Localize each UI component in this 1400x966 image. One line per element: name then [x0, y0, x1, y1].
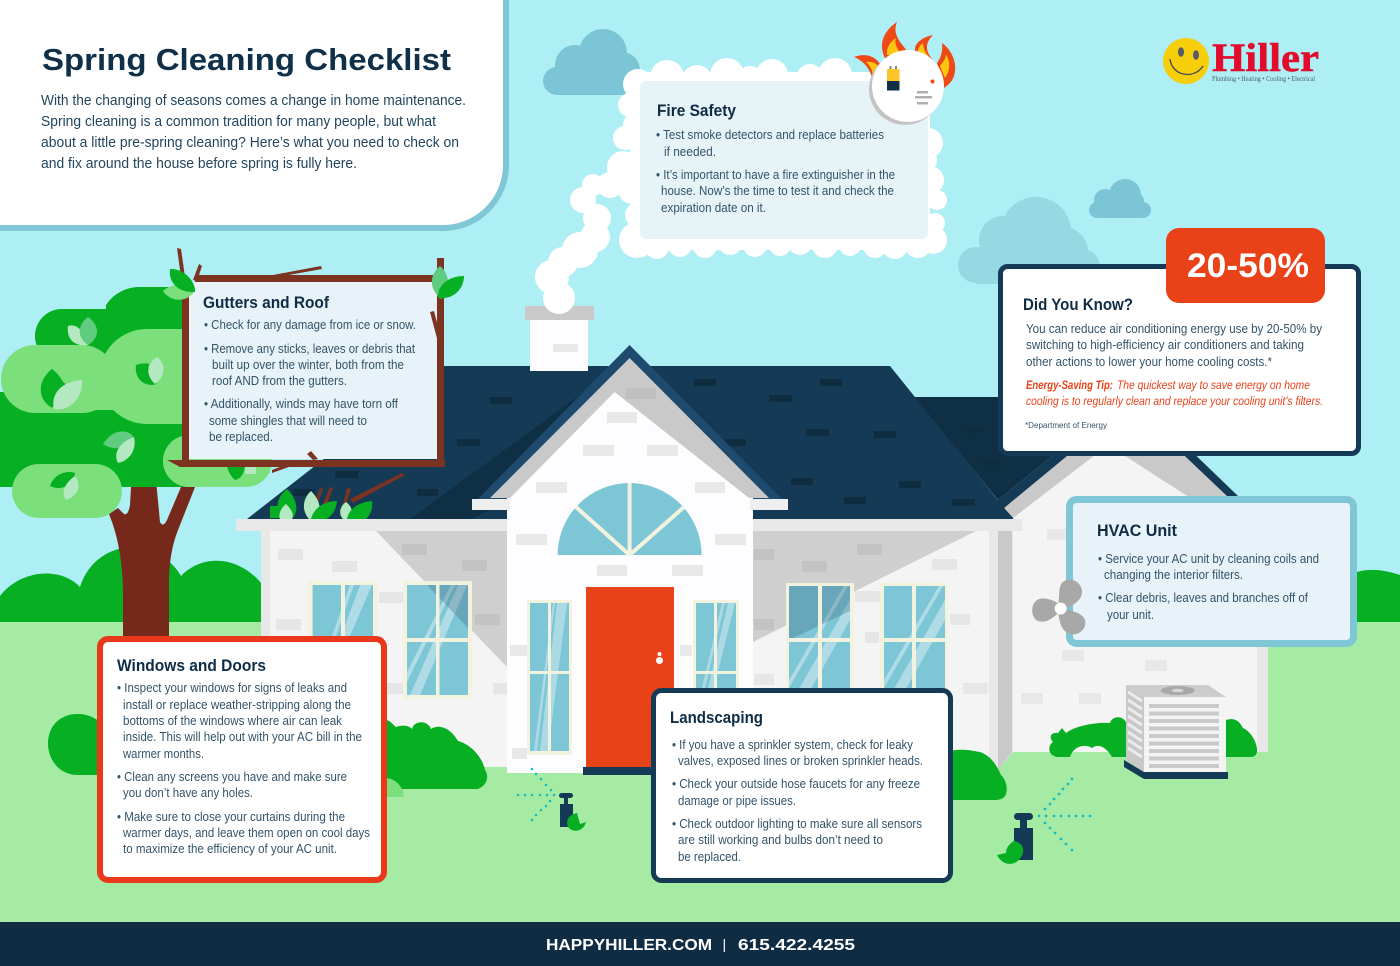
window: far left [308, 581, 377, 699]
tree foliage [0, 287, 272, 518]
list: warmer days, and leave them open on cool days [122, 826, 370, 840]
back roof shade [914, 397, 1052, 500]
hills behind house [0, 547, 1400, 622]
list: • Check for any damage from ice or snow. [204, 318, 416, 332]
panel: windows and doors [100, 639, 384, 880]
list: be replaced. [678, 850, 741, 864]
intro paragraph: Spring cleaning is a common tradition for many people, but what [41, 114, 436, 130]
tree trunk [109, 470, 195, 640]
list [672, 738, 923, 864]
bush: beside AC left [1049, 717, 1126, 757]
energy tip: Energy-Saving Tip: [1026, 380, 1113, 392]
list: changing the interior filters. [1104, 568, 1243, 582]
list [117, 681, 370, 856]
tree [0, 287, 272, 640]
panel: hvac unit [1032, 500, 1354, 644]
heading: Fire Safety [657, 101, 736, 120]
list: are still working and bulbs don’t need to [678, 833, 883, 847]
body text [1026, 322, 1323, 369]
energy tip: cooling is to regularly clean and replace your cooling unit’s filters. [1026, 396, 1323, 408]
panel: gutters and roof [163, 248, 464, 519]
list: your unit. [1107, 608, 1154, 622]
list: some shingles that will need to [209, 414, 367, 428]
bush: beside column [945, 750, 1007, 800]
right column [989, 531, 1013, 770]
cloud: top centre [543, 29, 640, 95]
body text: switching to high-efficiency air conditioners and taking [1026, 338, 1304, 352]
smoke trail and cloud [535, 58, 947, 314]
footer [0, 922, 1400, 966]
list: warmer months. [122, 747, 204, 761]
front window right [693, 600, 739, 700]
list: roof AND from the gutters. [212, 374, 347, 388]
house: chimney [525, 306, 594, 371]
list: • Clean any screens you have and make sure [117, 770, 347, 784]
sprinkler: left [517, 768, 586, 831]
list: to maximize the efficiency of your AC unit. [123, 842, 337, 856]
list: if needed. [664, 145, 716, 159]
list: install or replace weather-stripping along the [123, 698, 351, 712]
gutter debris [270, 473, 405, 519]
energy tip [1026, 380, 1323, 408]
list: • Inspect your windows for signs of leaks and [117, 681, 347, 695]
footer: 615.422.4255 [738, 937, 855, 954]
house: left and right walls [261, 530, 995, 767]
sign leaves [163, 266, 464, 300]
list: valves, exposed lines or broken sprinkler heads. [678, 754, 923, 768]
sign frame [167, 248, 445, 473]
intro paragraph [41, 93, 466, 172]
window: far right [880, 583, 948, 699]
window: third right [786, 583, 854, 699]
icon: fan [1032, 579, 1085, 634]
heading: Windows and Doors [117, 656, 266, 675]
door [583, 587, 674, 775]
sprinkler: right [997, 778, 1091, 864]
window: second left [403, 581, 472, 699]
cloud: small right [1089, 179, 1151, 218]
list: • Service your AC unit by cleaning coils and [1098, 552, 1319, 566]
intro paragraph: about a little pre-spring cleaning? Here’s what you need to check on [41, 135, 459, 151]
list: bottoms of the windows where air can leak [123, 714, 343, 728]
arched window [558, 483, 702, 555]
body text: You can reduce air conditioning energy use by 20-50% by [1026, 322, 1323, 336]
logo [1163, 35, 1319, 84]
footer: | [722, 936, 726, 952]
title: Spring Cleaning Checklist [42, 42, 451, 77]
icon: smiley [1163, 38, 1209, 84]
list: • Test smoke detectors and replace batteries [656, 128, 884, 142]
energy tip: The quickest way to save energy on home [1117, 380, 1310, 392]
list: expiration date on it. [661, 201, 766, 215]
list: house. Now’s the time to test it and check the [661, 184, 894, 198]
cloud: large right [958, 197, 1100, 285]
logo: Plumbing • Heating • Cooling • Electrical [1212, 75, 1315, 83]
house: right wing [1000, 392, 1268, 752]
panel: landscaping [654, 690, 950, 880]
list: damage or pipe issues. [678, 794, 796, 808]
logo: Hiller [1212, 35, 1319, 80]
list: • It’s important to have a fire extinguisher in the [656, 168, 895, 182]
heading: Gutters and Roof [203, 293, 329, 312]
list: inside. This will help out with your AC bill in the [123, 730, 362, 744]
eave band [236, 519, 1022, 531]
house: main roof [247, 366, 1067, 519]
icon: smoke detector on fire [854, 22, 955, 125]
list: you don’t have any holes. [123, 786, 253, 800]
roof surface [247, 366, 1013, 519]
heading: HVAC Unit [1097, 521, 1177, 540]
panel: did you know [1000, 228, 1358, 454]
panel: intro [0, 0, 509, 231]
intro paragraph: With the changing of seasons comes a change in home maintenance. [41, 93, 466, 109]
list [656, 128, 895, 215]
footer: HAPPYHILLER.COM [546, 937, 712, 954]
bush: by windows panel [385, 720, 487, 797]
front window left [527, 600, 572, 755]
list: • If you have a sprinkler system, check for leaky [672, 738, 914, 752]
intro paragraph: and fix around the house before spring is fully here. [41, 156, 357, 172]
list: • Check outdoor lighting to make sure all sensors [672, 817, 922, 831]
AC unit [1124, 685, 1228, 779]
list: be replaced. [209, 430, 273, 444]
footnote: *Department of Energy [1025, 420, 1108, 430]
body text: other actions to lower your home cooling costs.* [1026, 355, 1272, 369]
list: • Check your outside hose faucets for any freeze [672, 777, 920, 791]
heading: Did You Know? [1023, 295, 1133, 314]
stat badge: 20-50% [1187, 247, 1309, 285]
bush: beside AC right [1226, 719, 1257, 757]
tree leaves [41, 317, 256, 500]
bush: far left [48, 714, 102, 775]
list [204, 318, 416, 444]
panel: fire safety [535, 22, 955, 314]
heading: Landscaping [670, 708, 763, 727]
house: front gable [472, 345, 788, 773]
list: built up over the winter, both from the [212, 358, 404, 372]
list: • Remove any sticks, leaves or debris that [204, 342, 415, 356]
list [1098, 552, 1319, 622]
list: • Clear debris, leaves and branches off of [1098, 591, 1308, 605]
ground [0, 622, 1400, 922]
list: • Make sure to close your curtains during the [117, 810, 345, 824]
list: • Additionally, winds may have torn off [204, 397, 398, 411]
stat badge [1166, 228, 1325, 303]
roof shade [410, 384, 610, 519]
